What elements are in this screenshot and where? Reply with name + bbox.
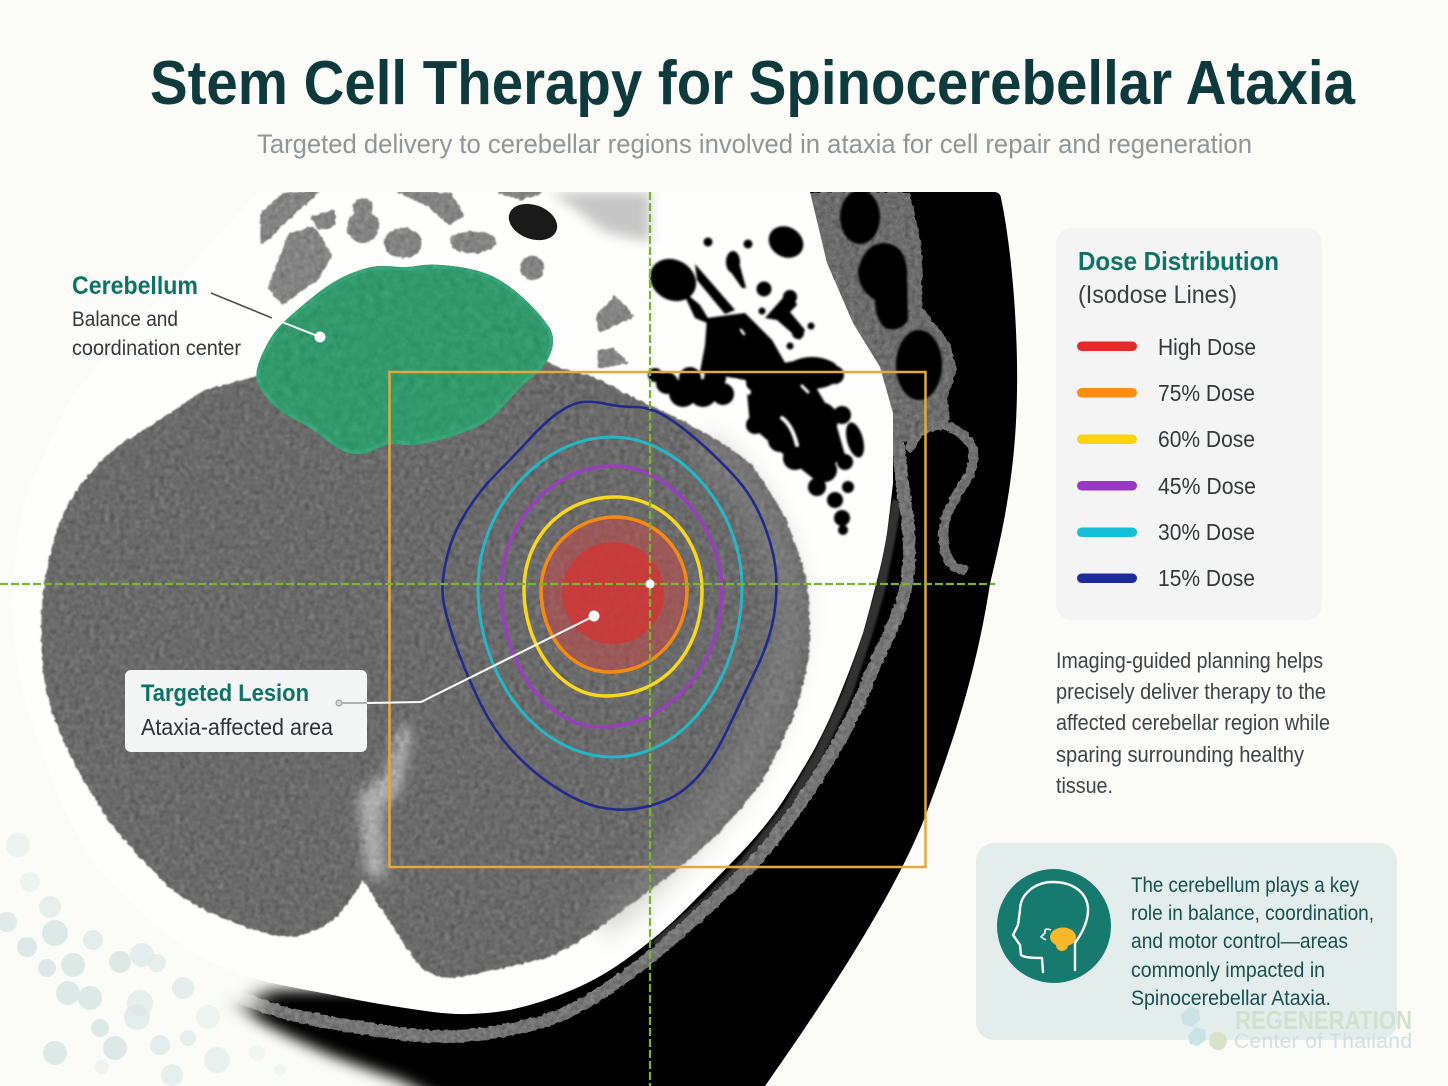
cerebellum heading: Cerebellum [72,272,198,300]
lesion fill [541,517,687,672]
black background air [668,192,1018,1086]
ear tube outline [910,425,973,570]
treatment target box [390,372,926,867]
sinus patches near skull base [262,192,632,366]
crosshair dashed lines [0,192,995,1086]
30 percent isodose [478,437,742,757]
legend card [1056,228,1322,620]
legend: 15% dose: 15% Dose [1158,565,1255,591]
callout text: and motor control—areas [1131,929,1348,953]
legend: 75% dose [1077,380,1255,406]
scalp tissue upper right [800,192,957,445]
soft black fade lower left [228,980,509,1086]
lesion leader line [336,610,600,706]
75 percent isodose [541,517,687,672]
15 percent isodose [442,402,776,810]
cerebellum description: coordination center [72,336,241,360]
lesion heading: Targeted Lesion [141,680,309,707]
description paragraph: precisely deliver therapy to the [1056,679,1326,704]
cerebellum highlight region [258,266,551,452]
45 percent isodose [501,466,722,727]
falx bright band [358,720,412,880]
title: Stem Cell Therapy for Spinocerebellar Ataxia [150,49,1355,118]
panel: dose distribution legend [1056,228,1322,620]
CT scan image [0,190,1017,1086]
cerebellum description [72,307,241,360]
watermark logo [1181,1005,1412,1053]
dark sphenoid air pocket [508,204,558,240]
targeted lesion label [125,670,367,752]
panel: cerebellum callout [976,843,1397,1040]
scalp pockets [840,190,942,400]
description paragraph [1056,648,1330,798]
dark tissue haze beside skull [655,500,897,945]
label card [125,670,367,752]
callout text: commonly impacted in [1131,958,1325,982]
cerebellum leader line [211,293,326,342]
callout card [976,843,1397,1040]
legend: high dose [1077,334,1256,360]
legend: 75% dose: 75% Dose [1158,380,1255,406]
legend: 30% dose [1077,519,1255,545]
description paragraph: tissue. [1056,773,1113,798]
legend heading: Dose Distribution [1078,246,1279,276]
legend: 15% dose [1077,565,1255,591]
description paragraph: sparing surrounding healthy [1056,742,1304,767]
white gaps in air cells [735,330,808,445]
isodose lines [442,402,776,810]
white skull bone [256,192,893,1014]
subtitle: Targeted delivery to cerebellar regions involved in ataxia for cell repair and regeneration [257,129,1252,159]
decorative hexagon dots lower left [0,833,286,1086]
lighter upper tissue [550,192,650,242]
lighter rim of the right lobe [600,445,789,925]
legend: 60% dose: 60% Dose [1158,426,1255,452]
legend: 30% dose: 30% Dose [1158,519,1255,545]
mastoid air cells [642,220,867,535]
60 percent isodose [524,497,702,696]
callout text: Spinocerebellar Ataxia. [1131,986,1331,1010]
crosshair centre point [646,580,654,588]
description paragraph: affected cerebellar region while [1056,710,1330,735]
watermark logo: REGENERATION [1235,1005,1412,1035]
soft fade of scalp at lower left [210,978,280,1022]
lesion description: Ataxia-affected area [141,714,333,740]
watermark logo: Center of Thailand [1234,1030,1412,1053]
callout text [1131,873,1374,1010]
callout text: The cerebellum plays a key [1131,873,1359,897]
legend: high dose: High Dose [1158,334,1256,360]
icon: head with cerebellum [997,869,1111,983]
legend: 45% dose: 45% Dose [1158,473,1256,499]
thin scalp band [217,443,909,1037]
brain tissue [41,340,810,978]
legend: 45% dose [1077,473,1256,499]
cerebellum label [72,272,241,360]
description paragraph: Imaging-guided planning helps [1056,648,1323,673]
legend: 60% dose [1077,426,1255,452]
cerebellum description: Balance and [72,307,178,331]
legend subheading: (Isodose Lines) [1078,281,1237,309]
callout text: role in balance, coordination, [1131,901,1374,925]
